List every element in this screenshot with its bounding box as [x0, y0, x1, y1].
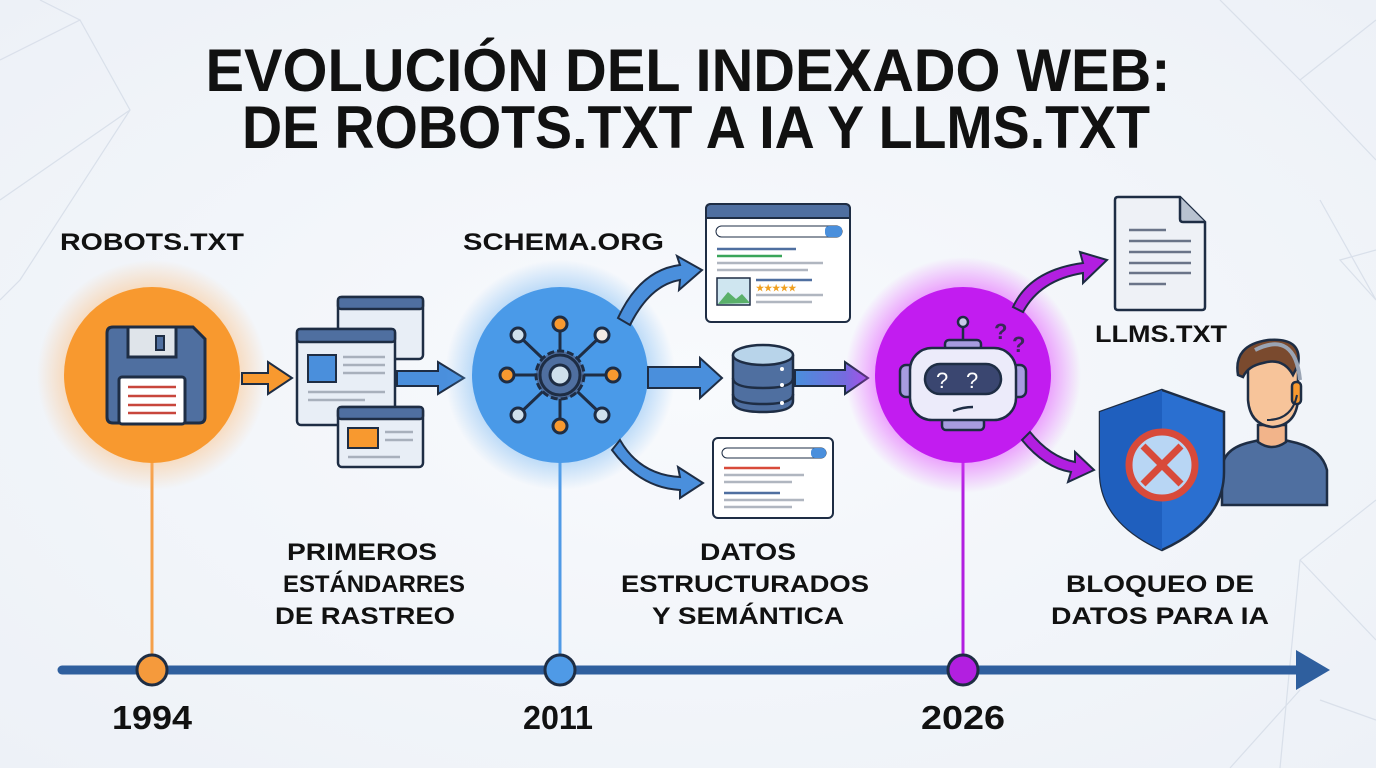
icon: orange circle with floppy disk — [37, 260, 267, 490]
years: 1994 — [112, 699, 193, 736]
caption: datos estructurados: DATOS — [700, 539, 796, 566]
caption: datos estructurados — [621, 539, 869, 630]
caption: datos estructurados: Y SEMÁNTICA — [652, 602, 844, 630]
arrows: purple branches — [1013, 252, 1107, 482]
connector lines — [152, 460, 963, 660]
years — [112, 699, 1005, 736]
caption: primeros estándarres: ESTÁNDARRES — [283, 570, 465, 598]
arrows: schema branches — [612, 256, 868, 498]
icon: search results browser — [706, 204, 850, 322]
arrow: blue to schema — [397, 362, 464, 394]
label: schema.org: SCHEMA.ORG — [463, 229, 664, 256]
label: robots.txt: ROBOTS.TXT — [60, 229, 244, 256]
caption: bloqueo de datos: DATOS PARA IA — [1051, 603, 1269, 630]
years: 2011 — [523, 699, 593, 736]
icon: small search browser — [713, 438, 833, 518]
years: 2026 — [921, 699, 1005, 736]
caption: bloqueo de datos: BLOQUEO DE — [1066, 571, 1254, 598]
icon: search results browser: ★★★★★ — [756, 283, 797, 293]
caption: primeros estándarres — [275, 539, 465, 630]
icon: person with headset — [1222, 340, 1327, 505]
icon: purple circle with confused robot: ? — [966, 368, 978, 393]
icon: purple circle with confused robot: ? — [994, 319, 1007, 344]
caption: bloqueo de datos — [1051, 571, 1269, 630]
icon: blue circle with network gear — [445, 260, 675, 490]
timeline axis — [62, 650, 1330, 690]
title: EVOLUCIÓN DEL INDEXADO WEB: — [206, 37, 1170, 104]
caption: primeros estándarres: DE RASTREO — [275, 603, 455, 630]
title — [206, 37, 1170, 161]
label: llms.txt: LLMS.TXT — [1095, 321, 1227, 348]
icon: purple circle with confused robot — [845, 257, 1081, 493]
caption: datos estructurados: ESTRUCTURADOS — [621, 571, 869, 598]
icon: purple circle with confused robot: ? — [1012, 332, 1025, 357]
icon: purple circle with confused robot: ? — [936, 368, 948, 393]
icon: browser stack — [297, 297, 423, 467]
arrow: orange — [242, 362, 292, 394]
icon: database — [733, 345, 793, 412]
timeline dots — [137, 655, 978, 685]
icon: document llms.txt — [1115, 197, 1205, 310]
title: DE ROBOTS.TXT A IA Y LLMS.TXT — [242, 94, 1150, 161]
caption: primeros estándarres: PRIMEROS — [287, 539, 437, 566]
icon: shield with block sign — [1100, 390, 1224, 550]
